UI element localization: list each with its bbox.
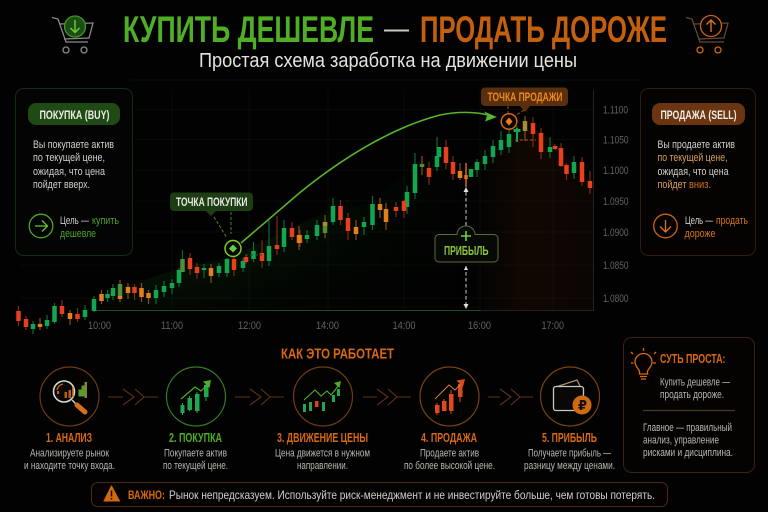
callout: buy point (170, 192, 253, 256)
panel: summary (624, 338, 754, 472)
icon: orange candles (435, 379, 465, 415)
icon: right arrow (29, 214, 53, 238)
sell description: Вы продаете актив (658, 139, 735, 151)
sell description (658, 139, 735, 191)
sell description: ожидая, что цена (658, 166, 729, 178)
summary note (643, 422, 733, 459)
price axis labels: 1.1100 (603, 104, 628, 116)
time axis labels: 16:00 (468, 320, 491, 332)
label: 2. ПОКУПКА (169, 430, 222, 445)
title (123, 9, 667, 50)
callout: sell point: ТОЧКА ПРОДАЖИ (488, 90, 562, 104)
warning bar (92, 482, 668, 506)
buy description (33, 139, 114, 191)
arrow: step 3 to 4 (363, 389, 411, 405)
warning bar: Рынок непредсказуем. Используйте риск-менеджмент и не инвестируйте больше, чем готовы потерять. (169, 488, 655, 502)
profit marker (435, 187, 498, 309)
buy description: ожидая, что цена (33, 166, 106, 178)
label: 3. ДВИЖЕНИЕ ЦЕНЫ (277, 430, 368, 445)
time axis labels (88, 320, 564, 332)
buy description: Вы покупаете актив (33, 139, 114, 151)
summary note: анализ, управление (643, 434, 719, 446)
sell description: пойдет (658, 179, 686, 191)
time axis labels: 10:00 (88, 320, 111, 332)
icon: light bulb (631, 348, 656, 379)
price axis labels: 1.0800 (603, 293, 628, 305)
step 5: profit (524, 367, 615, 472)
profit marker: ПРИБЫЛЬ (444, 244, 489, 258)
step 4: sell (404, 367, 495, 472)
sell goal: дороже (684, 228, 716, 240)
buy description: пойдет вверх. (33, 179, 90, 191)
label: 1. АНАЛИЗ (46, 430, 92, 445)
callout: sell point (481, 88, 568, 129)
step 2: buy (163, 367, 228, 472)
icon: mixed candles (303, 381, 341, 412)
step 4: sell: Продаете актив (420, 448, 479, 460)
buy goal: Цель — (60, 215, 89, 227)
summary note: рисками и дисциплина. (643, 447, 733, 459)
sell description: по текущей цене, (658, 152, 728, 164)
icon: rising green candles (180, 380, 211, 415)
arrow: step 2 to 3 (235, 389, 284, 405)
step 5: profit: Получаете прибыль — (528, 448, 611, 460)
buy badge (28, 103, 120, 125)
sell badge: ПРОДАЖА (SELL) (660, 110, 737, 122)
candlesticks (18, 116, 590, 334)
time axis labels: 12:00 (238, 320, 261, 332)
buy goal: дешевле (60, 228, 96, 240)
price area: green (122, 210, 330, 298)
summary text (660, 376, 730, 401)
label: 4. ПРОДАЖА (421, 430, 477, 445)
price area: red (470, 130, 593, 310)
step 1: analysis: Анализируете рынок (30, 448, 109, 460)
icon: warning triangle (104, 486, 120, 501)
time axis labels: 17:00 (542, 320, 564, 332)
step 1: analysis (24, 367, 115, 472)
step 2: buy: Покупаете актив (164, 448, 227, 460)
subtitle: Простая схема заработка на движении цены (199, 50, 577, 72)
icon: green shopping cart (52, 16, 93, 53)
price axis labels: 1.0900 (603, 227, 628, 239)
step 5: profit: разницу между ценами. (524, 460, 615, 472)
chart (18, 80, 640, 334)
buy goal: купить (92, 215, 119, 227)
icon: wallet with coin: ₽ (578, 398, 587, 413)
time axis labels: 11:00 (161, 320, 183, 332)
buy goal (60, 215, 119, 240)
price axis labels: 1.0850 (603, 260, 628, 272)
step 3: price movement (275, 367, 370, 472)
summary heading: СУТЬ ПРОСТА: (660, 351, 726, 366)
icon: orange shopping cart (686, 16, 728, 53)
sell badge (652, 103, 745, 125)
step 4: sell: по более высокой цене. (404, 460, 495, 472)
summary text: продать дороже. (660, 389, 724, 401)
arrow: buy to sell curve (241, 112, 497, 243)
summary text: Купить дешевле — (660, 376, 730, 388)
arrow: step 4 to 5 (488, 389, 533, 405)
price axis labels: 1.1050 (603, 134, 628, 146)
panel: sell (640, 88, 756, 256)
title: КУПИТЬ ДЕШЕВЛЕ (123, 9, 374, 50)
label: 5. ПРИБЫЛЬ (542, 430, 597, 445)
buy description: по текущей цене, (33, 152, 105, 164)
icon: magnifier (54, 381, 87, 412)
panel: buy (16, 88, 132, 256)
sell goal (684, 215, 748, 240)
step 3: price movement: направлении. (297, 460, 348, 472)
time axis labels: 14:00 (392, 320, 416, 332)
summary note: Главное — правильный (643, 422, 732, 434)
time axis labels: 14:00 (316, 320, 339, 332)
heading: how it works: КАК ЭТО РАБОТАЕТ (281, 346, 394, 362)
warning bar: ВАЖНО: (128, 488, 165, 502)
buy badge: ПОКУПКА (BUY) (40, 110, 110, 122)
sell goal: Цель — (685, 215, 713, 227)
step 1: analysis: и находите точку входа. (24, 460, 115, 472)
step 2: buy: по текущей цене. (163, 460, 228, 472)
arrow: step 1 to 2 (108, 389, 158, 405)
icon: down arrow (654, 214, 677, 238)
step 3: price movement: Цена движется в нужном (275, 448, 370, 460)
price axis labels: 1.0950 (603, 196, 628, 208)
sell goal: продать (716, 215, 748, 227)
price axis labels (603, 104, 628, 305)
title: ПРОДАТЬ ДОРОЖЕ (420, 9, 667, 50)
price axis labels: 1.1000 (603, 165, 628, 177)
callout: buy point: ТОЧКА ПОКУПКИ (176, 195, 248, 209)
sell description: вниз. (689, 179, 711, 191)
